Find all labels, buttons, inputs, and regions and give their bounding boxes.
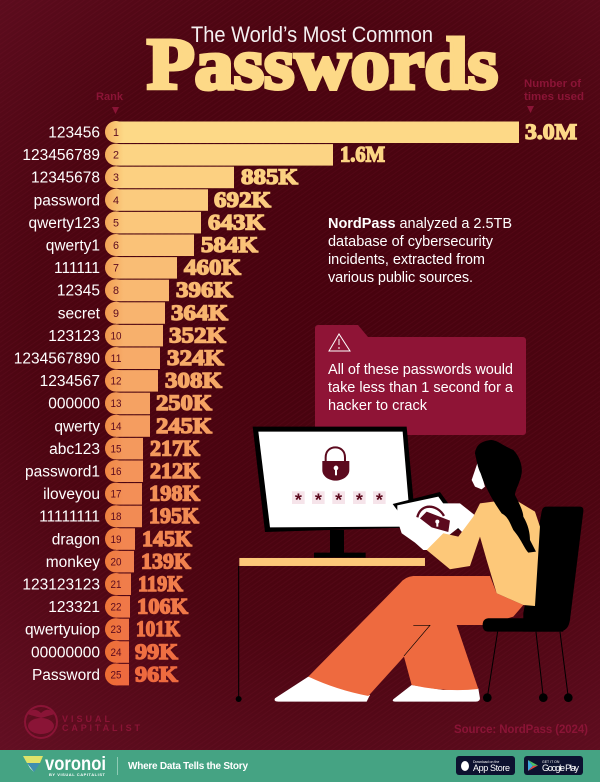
row 8: 12345: 12345: [57, 283, 100, 300]
row 1: 123456: [48, 119, 577, 144]
row 2: 123456789: [22, 142, 385, 167]
footer bar: [0, 750, 600, 782]
column label: rank: [96, 91, 124, 114]
row 25: Password: [32, 661, 178, 686]
row 15: abc123: abc123: [49, 441, 100, 458]
row 22: 123321: 106K: [137, 594, 188, 619]
text block: NordPass note: [328, 216, 512, 286]
password asterisks: *: [335, 489, 342, 509]
row 3: 12345678: [31, 164, 298, 189]
row 12: 1234567: [40, 368, 222, 393]
row 16: password1: 212K: [150, 458, 200, 483]
row 12: 1234567: 12: [110, 376, 122, 388]
row 18: 11111111: 18: [110, 511, 122, 523]
callout: crack warning: hacker to crack: [328, 398, 428, 414]
row 14: qwerty: qwerty: [54, 418, 100, 435]
logo: Visual Capitalist: CAPITALIST: [62, 723, 140, 733]
row 8: 12345: 8: [113, 285, 119, 297]
icon: padlock: [322, 447, 349, 481]
badge: Google Play: [524, 756, 583, 775]
row 17: iloveyou: 198K: [149, 481, 200, 506]
tablet and hands: [393, 492, 477, 550]
row 7: 111111: 7: [113, 263, 119, 275]
row 10: 123123: [48, 322, 226, 347]
row 19: dragon: 145K: [142, 526, 192, 551]
row 2: 123456789: 2: [113, 150, 119, 162]
row 24: 00000000: 24: [110, 647, 122, 659]
row 21: 123123123: 21: [110, 579, 122, 591]
chair seat: [483, 618, 563, 632]
password asterisks: *: [376, 489, 383, 509]
row 5: qwerty123: qwerty123: [28, 215, 100, 232]
row 23: qwertyuiop: qwertyuiop: [25, 622, 100, 639]
logo: Visual Capitalist: VISUAL: [62, 714, 110, 724]
row 9: secret: [58, 300, 228, 325]
column label: number of times used: times used: [524, 91, 584, 103]
row 13: 000000: 13: [110, 398, 122, 410]
chair back: [483, 507, 583, 702]
row 19: dragon: dragon: [52, 531, 100, 548]
badge: App Store: App Store: [473, 763, 510, 773]
source: Source: NordPass (2024): [454, 724, 588, 736]
logo: Voronoi: voronoi: [45, 754, 106, 775]
row 12: 1234567: 308K: [165, 368, 222, 393]
row 11: 1234567890: 11: [110, 353, 122, 365]
row 21: 123123123: [22, 571, 183, 596]
row 17: iloveyou: iloveyou: [43, 486, 100, 503]
logo: Voronoi: BY VISUAL CAPITALIST: [49, 772, 106, 777]
password asterisks: *: [295, 489, 302, 509]
desk: [236, 558, 425, 702]
row 15: abc123: 217K: [150, 435, 200, 460]
row 10: 123123: 10: [110, 330, 122, 342]
monitor: [253, 427, 416, 558]
row 22: 123321: 22: [110, 602, 122, 614]
row 20: monkey: 20: [110, 556, 122, 568]
row 5: qwerty123: [28, 209, 265, 234]
title: The World’s Most Common: [191, 22, 433, 47]
shoes: [275, 677, 480, 702]
hair and braid: [475, 440, 536, 553]
title: Passwords: [147, 24, 498, 104]
row 3: 12345678: 3: [113, 172, 119, 184]
face: [472, 463, 485, 489]
row 13: 000000: 250K: [156, 390, 212, 415]
row 14: qwerty: [54, 413, 212, 438]
row 13: 000000: 000000: [48, 396, 100, 413]
row 20: monkey: monkey: [46, 554, 100, 571]
row 25: Password: Password: [32, 667, 100, 684]
row 15: abc123: 15: [110, 443, 122, 455]
password asterisks: *: [356, 489, 363, 509]
row 23: qwertyuiop: 23: [110, 624, 122, 636]
row 6: qwerty1: 584K: [201, 232, 258, 257]
row 2: 123456789: 123456789: [22, 147, 100, 164]
badge: App Store: [456, 756, 515, 775]
row 11: 1234567890: 324K: [167, 345, 224, 370]
icon: warning triangle: [329, 334, 350, 351]
text block: NordPass note: various public sources.: [328, 270, 473, 286]
row 8: 12345: [57, 277, 233, 302]
row 1: 123456: 1: [113, 127, 119, 139]
row 9: secret: 9: [113, 308, 119, 320]
row 11: 1234567890: 1234567890: [14, 350, 100, 368]
column label: number of times used: Number of: [524, 78, 581, 90]
column label: rank: Rank: [96, 91, 124, 103]
column label: number of times used: [524, 78, 584, 113]
shirt: [427, 502, 540, 606]
row 16: password1: password1: [25, 464, 100, 480]
row 13: 000000: [48, 390, 212, 415]
row 17: iloveyou: [43, 481, 200, 506]
row 12: 1234567: 1234567: [40, 373, 100, 390]
row 7: 111111: 460K: [184, 255, 241, 280]
row 19: dragon: [52, 526, 192, 551]
row 4: password: 4: [113, 195, 119, 207]
row 14: qwerty: 14: [110, 421, 122, 433]
logo: Visual Capitalist: [25, 706, 140, 738]
row 6: qwerty1: 6: [113, 240, 119, 252]
badge: Google Play: Google Play: [542, 763, 580, 773]
tagline: Where Data Tells the Story: [128, 761, 248, 772]
logo: Voronoi: [23, 754, 106, 777]
row 19: dragon: 19: [110, 534, 122, 546]
row 25: Password: 96K: [135, 661, 178, 686]
row 20: monkey: [46, 548, 191, 573]
row 10: 123123: 352K: [169, 322, 226, 347]
row 21: 123123123: 123123123: [22, 576, 100, 594]
badge: Google Play: GET IT ON: [542, 760, 560, 764]
text block: NordPass note: database of cybersecurity: [328, 234, 494, 250]
row 20: monkey: 139K: [141, 548, 191, 573]
row 10: 123123: 123123: [48, 328, 100, 345]
row 8: 12345: 396K: [176, 277, 233, 302]
row 3: 12345678: 885K: [241, 164, 298, 189]
row 6: qwerty1: [46, 232, 258, 257]
row 18: 11111111: 11111111: [39, 509, 100, 526]
illustration: woman at computer: [236, 427, 583, 702]
row 9: secret: 364K: [171, 300, 228, 325]
row 24: 00000000: [31, 639, 178, 664]
callout: crack warning: [315, 325, 526, 435]
row 7: 111111: 111111: [54, 260, 100, 277]
text block: NordPass note: NordPass analyzed a 2.5TB: [328, 216, 512, 232]
row 16: password1: [25, 458, 200, 483]
row 4: password: 692K: [214, 187, 271, 212]
bar chart: [14, 119, 577, 686]
row 18: 11111111: [39, 503, 199, 528]
row 7: 111111: [54, 255, 241, 280]
text block: NordPass note: incidents, extracted from: [328, 252, 485, 268]
row 6: qwerty1: qwerty1: [46, 238, 100, 254]
callout: crack warning: All of these passwords would: [328, 362, 513, 378]
row 16: password1: 16: [110, 466, 122, 478]
password asterisks: *: [315, 489, 322, 509]
password asterisks: [292, 489, 386, 509]
row 24: 00000000: 99K: [135, 639, 178, 664]
row 17: iloveyou: 17: [110, 489, 122, 501]
row 3: 12345678: 12345678: [31, 170, 100, 187]
row 2: 123456789: 1.6M: [340, 142, 385, 167]
row 14: qwerty: 245K: [156, 413, 212, 438]
row 5: qwerty123: 643K: [208, 209, 265, 234]
row 24: 00000000: 00000000: [31, 644, 100, 661]
row 23: qwertyuiop: [25, 616, 180, 641]
callout: crack warning: take less than 1 second for a: [328, 380, 514, 396]
row 23: qwertyuiop: 101K: [136, 616, 180, 641]
row 18: 11111111: 195K: [149, 503, 199, 528]
row 1: 123456: 3.0M: [525, 119, 577, 144]
row 1: 123456: 123456: [48, 124, 100, 142]
row 5: qwerty123: 5: [113, 217, 119, 229]
row 22: 123321: [48, 594, 188, 619]
row 22: 123321: 123321: [48, 599, 100, 616]
row 4: password: [34, 187, 271, 212]
row 25: Password: 25: [110, 669, 122, 681]
trousers: [308, 576, 523, 696]
row 15: abc123: [49, 435, 200, 460]
badge: App Store: Download on the: [473, 760, 499, 764]
row 4: password: password: [34, 192, 100, 209]
row 11: 1234567890: [14, 345, 224, 370]
row 9: secret: secret: [58, 305, 101, 322]
row 21: 123123123: 119K: [138, 571, 183, 596]
